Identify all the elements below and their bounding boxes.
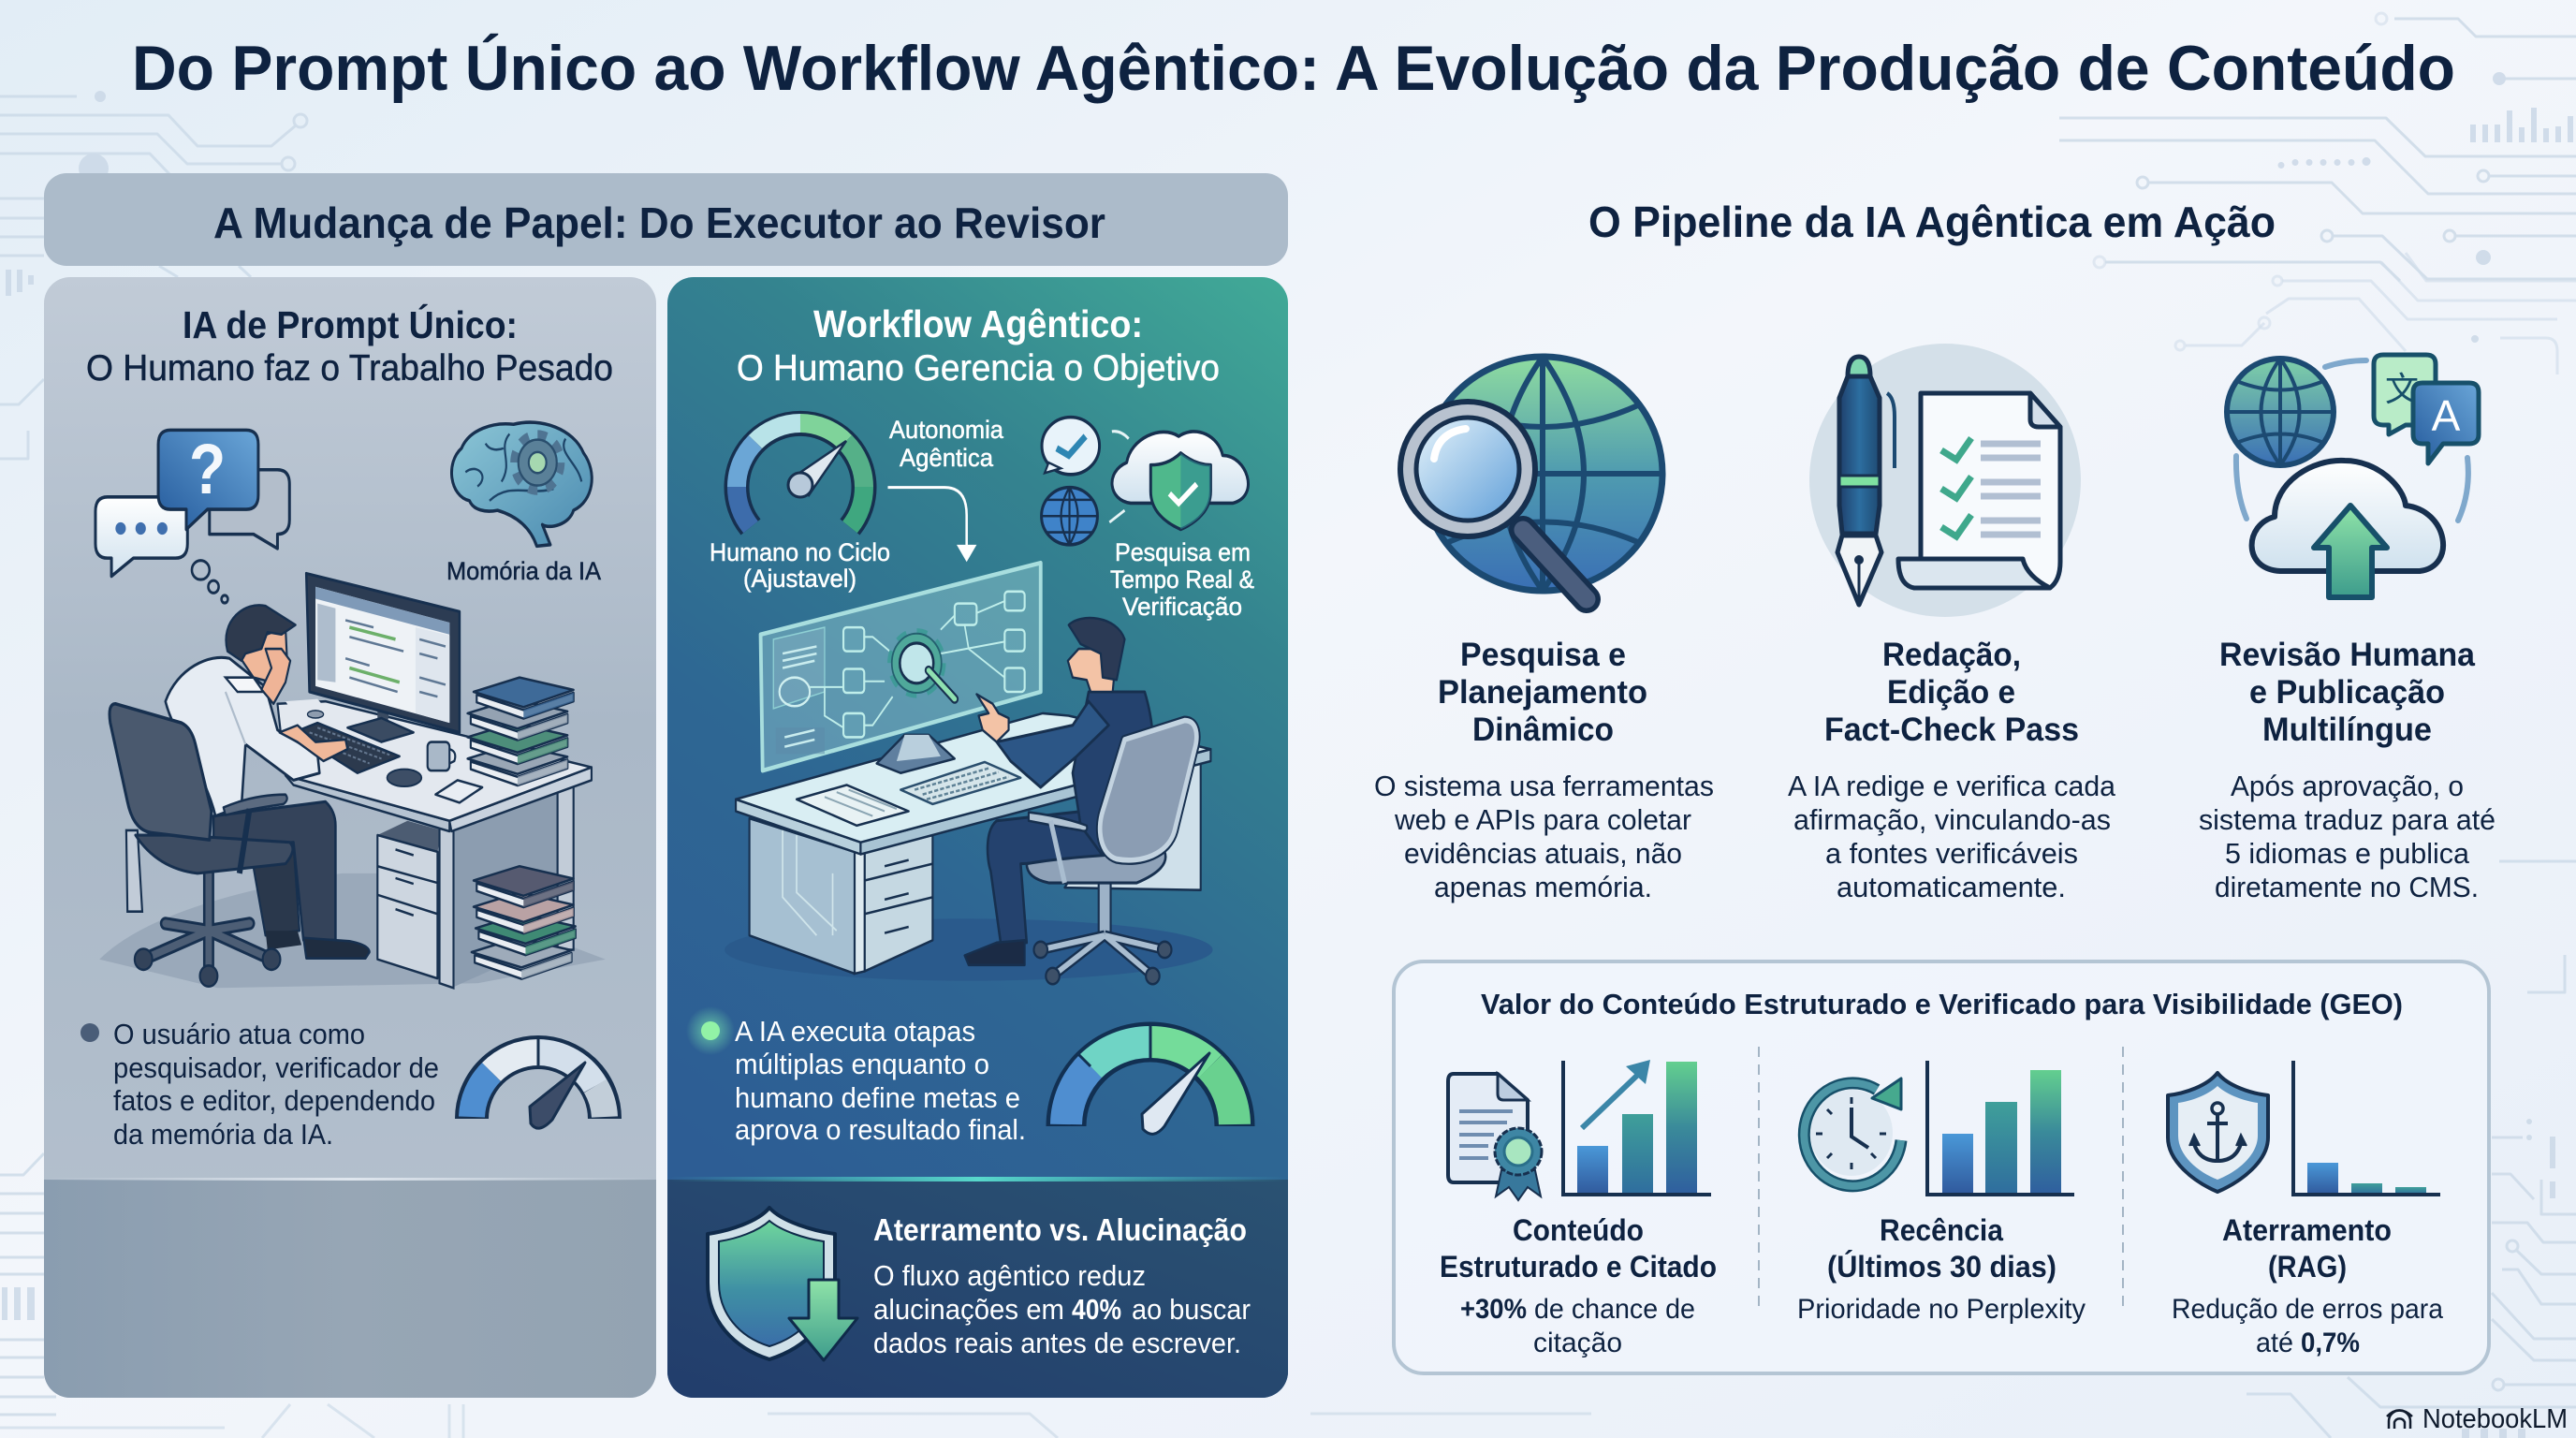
label: Momória da IA: Momória da IA <box>446 557 601 585</box>
bar chart falling <box>2293 1061 2440 1195</box>
icon: gauge high autonomy <box>1066 1024 1235 1134</box>
icon: shield with anchor <box>2168 1073 2268 1192</box>
pipeline step 3: Revisão Humana <box>2199 355 2496 903</box>
panel heading: IA de Prompt Único <box>86 303 613 389</box>
bottom section: Aterramento vs. Alucinação <box>667 1177 1288 1398</box>
bullet text: role of the user: da memória da IA. <box>113 1118 333 1151</box>
panel: valor do conteúdo GEO <box>1394 961 2489 1373</box>
label: Humano no Ciclo <box>710 538 890 593</box>
icon: shield with down arrow <box>708 1208 857 1360</box>
panel title: Valor do Conteúdo Estruturado e Verificado para Visibilidade (GEO) <box>1481 988 2403 1020</box>
metric text: Aterramento <box>2222 1213 2392 1247</box>
description: A IA redige e verifica cada <box>1788 770 2116 802</box>
label: Autonomia Agêntica: Autonomia <box>889 416 1004 444</box>
pipeline step 2: Redação <box>1788 344 2116 903</box>
icon: fountain pen and checklist <box>1809 344 2081 617</box>
metric text: Prioridade no Perplexity <box>1797 1294 2086 1325</box>
metric text <box>1797 1213 2086 1325</box>
text: reduction of hallucinations: O fluxo agêntico reduz <box>873 1259 1146 1292</box>
metric text <box>2172 1213 2443 1358</box>
pipeline step 1: Pesquisa e Planejamento <box>1374 357 1714 903</box>
description: sistema traduz para até <box>2199 803 2496 836</box>
metric text: citação <box>1533 1328 1622 1358</box>
panel: IA de Prompt Único <box>44 277 656 1398</box>
panel heading: IA de Prompt Único: O Humano faz o Trabalho Pesado <box>86 348 613 389</box>
text: reduction of hallucinations: alucinações em <box>873 1293 1064 1326</box>
metric text: Estruturado e Citado <box>1440 1250 1717 1284</box>
icon: globe with magnifying glass <box>1400 357 1662 599</box>
metric text: Recência <box>1880 1213 2003 1247</box>
description: web e APIs para coletar <box>1394 803 1691 836</box>
panel heading: IA de Prompt Único: IA de Prompt Único: <box>183 303 518 346</box>
heading: Dinâmico <box>1472 712 1614 748</box>
panel heading: Workflow Agêntico: O Humano Gerencia o Objetivo <box>737 348 1220 389</box>
label: Pesquisa em Tempo Real: Pesquisa em <box>1115 538 1251 566</box>
heading: Planejamento <box>1438 674 1647 711</box>
metric text: Redução de erros para <box>2172 1294 2443 1325</box>
bottom section fill <box>44 1180 656 1398</box>
heading <box>1824 637 2079 748</box>
description: evidências atuais, não <box>1404 837 1682 870</box>
title: Do Prompt Único ao Workflow Agêntico: A Evolução da Produção de Conteúdo <box>132 33 2455 104</box>
illustration: stressed worker at desk: ? <box>189 429 226 509</box>
description <box>1374 770 1714 903</box>
metric: Aterramento RAG <box>2168 1061 2443 1358</box>
label: Pesquisa em Tempo Real: Verificação <box>1122 593 1242 621</box>
panel: Workflow Agêntico <box>667 277 1288 1398</box>
text: reduction of hallucinations: dados reais antes de escrever. <box>873 1327 1241 1359</box>
heading: Edição e <box>1887 674 2015 711</box>
text: reduction of hallucinations: 40% <box>1072 1293 1121 1326</box>
heading: Redação, <box>1882 637 2021 673</box>
label: Pesquisa em Tempo Real: Tempo Real & <box>1110 565 1254 594</box>
bullet text: agentic execution <box>686 1006 1026 1146</box>
metric text: (Últimos 30 dias) <box>1827 1250 2056 1284</box>
bullet text: role of the user: pesquisador, verificador de <box>113 1051 439 1084</box>
description: automaticamente. <box>1837 871 2066 903</box>
description: O sistema usa ferramentas <box>1374 770 1714 802</box>
metric text: (RAG) <box>2268 1250 2347 1284</box>
label: Humano no Ciclo: Humano no Ciclo <box>710 538 890 566</box>
panel heading: Workflow Agêntico: Workflow Agêntico: <box>813 302 1143 345</box>
bottom section: Aterramento vs. Alucinação: Aterramento vs. Alucinação <box>873 1212 1247 1247</box>
text: reduction of hallucinations <box>873 1259 1251 1359</box>
section header: A Mudança de Papel: A Mudança de Papel: Do Executor ao Revisor <box>213 198 1105 247</box>
heading: Fact-Check Pass <box>1824 712 2079 748</box>
heading: Revisão Humana <box>2219 637 2476 673</box>
bullet text: role of the user: O usuário atua como <box>113 1018 365 1050</box>
metric text: +30% <box>1460 1294 1527 1325</box>
description: a fontes verificáveis <box>1825 837 2078 870</box>
illustration: stressed worker at desk <box>95 422 606 988</box>
metric: Recência <box>1797 1061 2086 1325</box>
label: Autonomia Agêntica <box>889 416 1004 472</box>
heading: Multilíngue <box>2262 712 2432 748</box>
heading <box>2219 637 2476 748</box>
icon: document with seal <box>1448 1074 1542 1200</box>
bullet text: agentic execution: múltiplas enquanto o <box>735 1048 989 1080</box>
icon: globe, translation bubbles and cloud upload <box>2227 355 2479 597</box>
icon: globe, translation bubbles and cloud upload: A <box>2432 391 2461 440</box>
section header: A Mudança de Papel <box>44 173 1288 266</box>
icon: clock with arrow <box>1804 1078 1901 1186</box>
icon: human-in-the-loop gauge <box>737 423 864 527</box>
bullet text: agentic execution: aprova o resultado final. <box>735 1113 1026 1146</box>
description <box>2199 770 2496 903</box>
description <box>1788 770 2116 903</box>
section header: O Pipeline: O Pipeline da IA Agêntica em Ação <box>1588 198 2276 246</box>
metric text: Conteúdo <box>1513 1213 1644 1247</box>
panel heading: Workflow Agêntico <box>737 302 1220 389</box>
heading: Pesquisa e <box>1460 637 1626 673</box>
description: Após aprovação, o <box>2231 770 2464 802</box>
description: 5 idiomas e publica <box>2225 837 2470 870</box>
metric text <box>1440 1213 1717 1358</box>
label: Humano no Ciclo: (Ajustavel) <box>743 565 856 593</box>
description: afirmação, vinculando-as <box>1793 803 2111 836</box>
bullet text: agentic execution: humano define metas e <box>735 1081 1020 1114</box>
bar chart <box>1927 1061 2074 1195</box>
description: apenas memória. <box>1434 871 1652 903</box>
illustration: manager with holographic workflow <box>724 418 1248 984</box>
metric text: até <box>2256 1328 2293 1358</box>
label: Autonomia Agêntica: Agêntica <box>900 444 994 472</box>
heading: e Publicação <box>2249 674 2445 711</box>
bar chart rising <box>1563 1060 1711 1195</box>
description: diretamente no CMS. <box>2215 871 2479 903</box>
icon: globe, translation bubbles and cloud upload: 文 <box>2385 370 2419 408</box>
label: Pesquisa em Tempo Real <box>1110 538 1254 621</box>
metric text: de chance de <box>1534 1294 1695 1325</box>
bullet text: role of the user: fatos e editor, dependendo <box>113 1084 435 1117</box>
heading <box>1438 637 1647 748</box>
bullet text: role of the user <box>80 1018 439 1151</box>
bullet text: agentic execution: A IA executa otapas <box>735 1015 975 1048</box>
text: reduction of hallucinations: ao buscar <box>1132 1293 1251 1326</box>
icon: gauge low autonomy <box>472 1038 605 1128</box>
brand: NotebookLM: NotebookLM <box>2422 1404 2568 1434</box>
metric text: 0,7% <box>2301 1328 2360 1358</box>
metric: Conteúdo Estruturado <box>1440 1060 1717 1358</box>
